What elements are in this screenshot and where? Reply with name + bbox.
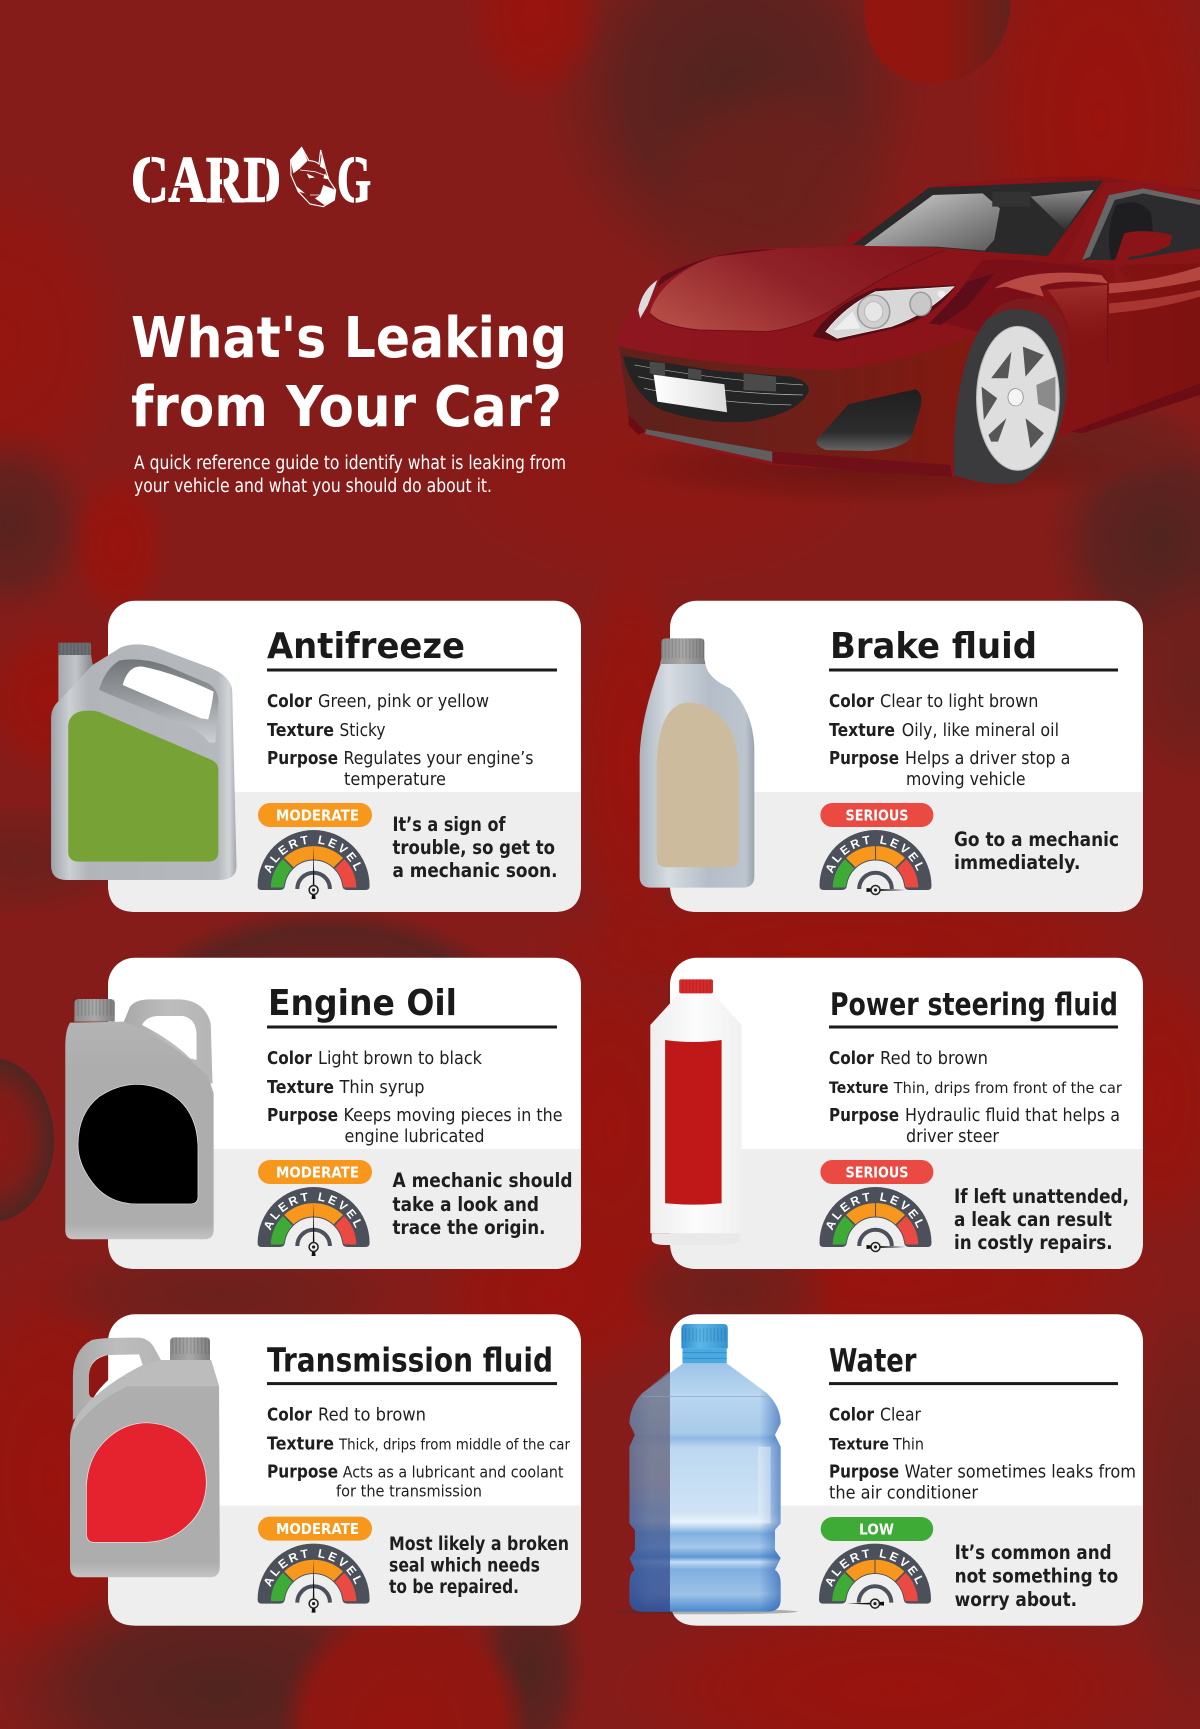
- text: purpose: Purpose: [829, 1463, 899, 1483]
- panel: Transmission fluid: [70, 1314, 581, 1626]
- alert advice: take a look and: [392, 1193, 539, 1216]
- text: purpose: driver steer: [906, 1127, 1000, 1147]
- text: purpose: temperature: [344, 770, 446, 790]
- alert gauge: [819, 1544, 931, 1609]
- text: texture: [267, 1078, 424, 1098]
- alert advice: It’s a sign of: [392, 813, 506, 836]
- subtitle: your vehicle and what you should do about it.: [134, 476, 492, 497]
- subtitle: A quick reference guide to identify what is leaking from: [134, 453, 566, 474]
- text: purpose: for the transmission: [336, 1482, 482, 1501]
- text: texture: [267, 1435, 571, 1455]
- text: color: Clear to light brown: [880, 692, 1038, 712]
- alert badge: MODERATE: [276, 1164, 359, 1182]
- alert advice: [392, 1169, 572, 1239]
- text: color: [267, 1406, 426, 1426]
- text: texture: Texture: [829, 1435, 889, 1454]
- alert gauge: [258, 1187, 370, 1256]
- alert badge: [821, 1517, 933, 1541]
- text: color: Color: [829, 1049, 874, 1069]
- heading: Power steering fluid: [830, 987, 1118, 1023]
- panel: Brake fluid: [640, 600, 1143, 912]
- text: color: [829, 1049, 988, 1069]
- alert advice: [389, 1534, 569, 1598]
- alert advice: Go to a mechanic: [954, 828, 1119, 851]
- alert badge: LOW: [859, 1521, 894, 1539]
- card background: [670, 958, 1143, 1269]
- text: color: Color: [267, 1049, 312, 1069]
- text: color: Clear: [880, 1406, 922, 1426]
- icon: water bottle: [612, 1324, 797, 1614]
- icon: engine oil jug: [65, 999, 214, 1239]
- card background: [108, 1314, 581, 1626]
- text: purpose: [829, 1106, 1120, 1147]
- text: texture: Texture: [267, 1078, 334, 1098]
- card background: [670, 601, 1143, 912]
- alert badge: SERIOUS: [846, 1164, 908, 1182]
- card background: [670, 1314, 1143, 1626]
- card background: [108, 601, 581, 912]
- alert badge: [258, 803, 372, 827]
- alert advice: to be repaired.: [389, 1577, 519, 1598]
- text: texture: Thick, drips from middle of the car: [338, 1436, 571, 1454]
- alert gauge: [820, 1187, 932, 1252]
- alert advice: trace the origin.: [392, 1216, 546, 1239]
- text: purpose: Keeps moving pieces in the: [344, 1106, 562, 1126]
- alert badge: SERIOUS: [846, 806, 908, 824]
- alert badge: [258, 1517, 372, 1541]
- heading: Engine Oil: [268, 983, 457, 1024]
- alert gauge: ALERT LEVEL: [826, 835, 923, 874]
- alert advice: If left unattended,: [954, 1185, 1129, 1208]
- title: [131, 306, 567, 440]
- text: color: Red to brown: [318, 1406, 426, 1426]
- text: purpose: Helps a driver stop a: [905, 749, 1070, 769]
- alert badge: [820, 803, 933, 827]
- subtitle: [134, 453, 566, 497]
- text: purpose: [829, 749, 1070, 790]
- text: color: [829, 1406, 922, 1426]
- text: texture: Texture: [829, 1078, 889, 1097]
- text: purpose: [267, 1106, 562, 1147]
- alert advice: not something to: [955, 1565, 1118, 1588]
- alert badge: MODERATE: [276, 1520, 359, 1538]
- alert gauge: [820, 830, 932, 896]
- alert badge: [258, 1160, 372, 1184]
- text: purpose: engine lubricated: [344, 1127, 484, 1147]
- alert advice: [954, 828, 1119, 874]
- text: purpose: Hydraulic fluid that helps a: [905, 1106, 1120, 1126]
- panel: Antifreeze: [51, 600, 581, 912]
- text: purpose: Purpose: [267, 749, 338, 769]
- alert gauge: [258, 830, 370, 899]
- text: purpose: Purpose: [829, 749, 899, 769]
- alert gauge: ALERT LEVEL: [264, 1549, 361, 1587]
- text: texture: [829, 721, 1059, 741]
- alert advice: worry about.: [955, 1588, 1077, 1611]
- text: purpose: Purpose: [267, 1463, 338, 1483]
- alert advice: trouble, so get to: [392, 836, 555, 859]
- alert advice: It’s common and: [955, 1541, 1112, 1564]
- alert gauge: ALERT LEVEL: [264, 835, 361, 874]
- text: purpose: [829, 1463, 1136, 1504]
- icon: power steering bottle: [650, 979, 742, 1245]
- text: color: Color: [829, 692, 874, 712]
- card background: [108, 958, 581, 1269]
- text: purpose: the air conditioner: [829, 1484, 979, 1504]
- alert advice: A mechanic should: [392, 1169, 572, 1192]
- icon: brake fluid bottle: [640, 638, 754, 888]
- panel: Power steering fluid: [650, 958, 1143, 1269]
- heading: Brake fluid: [830, 626, 1037, 667]
- text: color: Color: [267, 692, 312, 712]
- alert advice: immediately.: [954, 851, 1080, 874]
- text: purpose: [267, 749, 534, 790]
- text: color: Light brown to black: [318, 1049, 483, 1069]
- alert gauge: ALERT LEVEL: [826, 1192, 923, 1230]
- text: purpose: Purpose: [829, 1106, 899, 1126]
- text: texture: Texture: [267, 721, 334, 741]
- text: texture: Thin syrup: [339, 1078, 424, 1098]
- red sports car illustration: [608, 176, 1200, 505]
- title: What's Leaking: [131, 306, 567, 371]
- stencil breaks: [150, 157, 356, 203]
- panel: Engine Oil: [65, 958, 581, 1269]
- alert advice: [955, 1541, 1118, 1611]
- icon: dog head: [291, 147, 336, 207]
- text: purpose: Water sometimes leaks from: [905, 1463, 1136, 1483]
- text: color: Color: [829, 1406, 874, 1426]
- text: purpose: Regulates your engine’s: [344, 749, 534, 769]
- alert advice: [954, 1185, 1129, 1254]
- text: texture: Texture: [267, 1435, 334, 1455]
- alert gauge: ALERT LEVEL: [264, 1192, 361, 1230]
- heading: Transmission fluid: [267, 1341, 553, 1380]
- alert badge: MODERATE: [276, 806, 359, 824]
- icon: antifreeze jug: [51, 643, 237, 880]
- alert advice: [392, 813, 558, 882]
- heading: Water: [829, 1342, 917, 1380]
- text: texture: Thin: [892, 1435, 924, 1454]
- text: texture: Thin, drips from front of the car: [893, 1079, 1122, 1097]
- logo: G: [337, 144, 371, 216]
- text: color: Green, pink or yellow: [318, 692, 489, 712]
- alert advice: Most likely a broken: [389, 1534, 569, 1555]
- alert advice: a mechanic soon.: [392, 859, 558, 882]
- alert badge: [820, 1160, 933, 1184]
- alert gauge: ALERT LEVEL: [826, 1549, 922, 1587]
- title: from Your Car?: [131, 375, 562, 440]
- text: color: Red to brown: [880, 1049, 988, 1069]
- panel: Water: [612, 1314, 1143, 1626]
- heading: Antifreeze: [267, 626, 465, 667]
- text: purpose: Acts as a lubricant and coolant: [343, 1463, 564, 1482]
- text: texture: Sticky: [340, 721, 386, 741]
- alert advice: seal which needs: [389, 1556, 540, 1577]
- alert advice: in costly repairs.: [954, 1231, 1113, 1254]
- text: color: Color: [267, 1406, 312, 1426]
- alert advice: a leak can result: [954, 1208, 1112, 1231]
- text: texture: Texture: [829, 721, 895, 741]
- icon: transmission fluid jug: [70, 1337, 220, 1577]
- text: purpose: moving vehicle: [906, 770, 1026, 790]
- text: texture: Oily, like mineral oil: [902, 721, 1059, 741]
- logo: CARD: [131, 144, 281, 216]
- text: texture: [267, 721, 386, 741]
- text: purpose: Purpose: [267, 1106, 338, 1126]
- alert gauge: [258, 1544, 370, 1613]
- text: purpose: [267, 1463, 564, 1501]
